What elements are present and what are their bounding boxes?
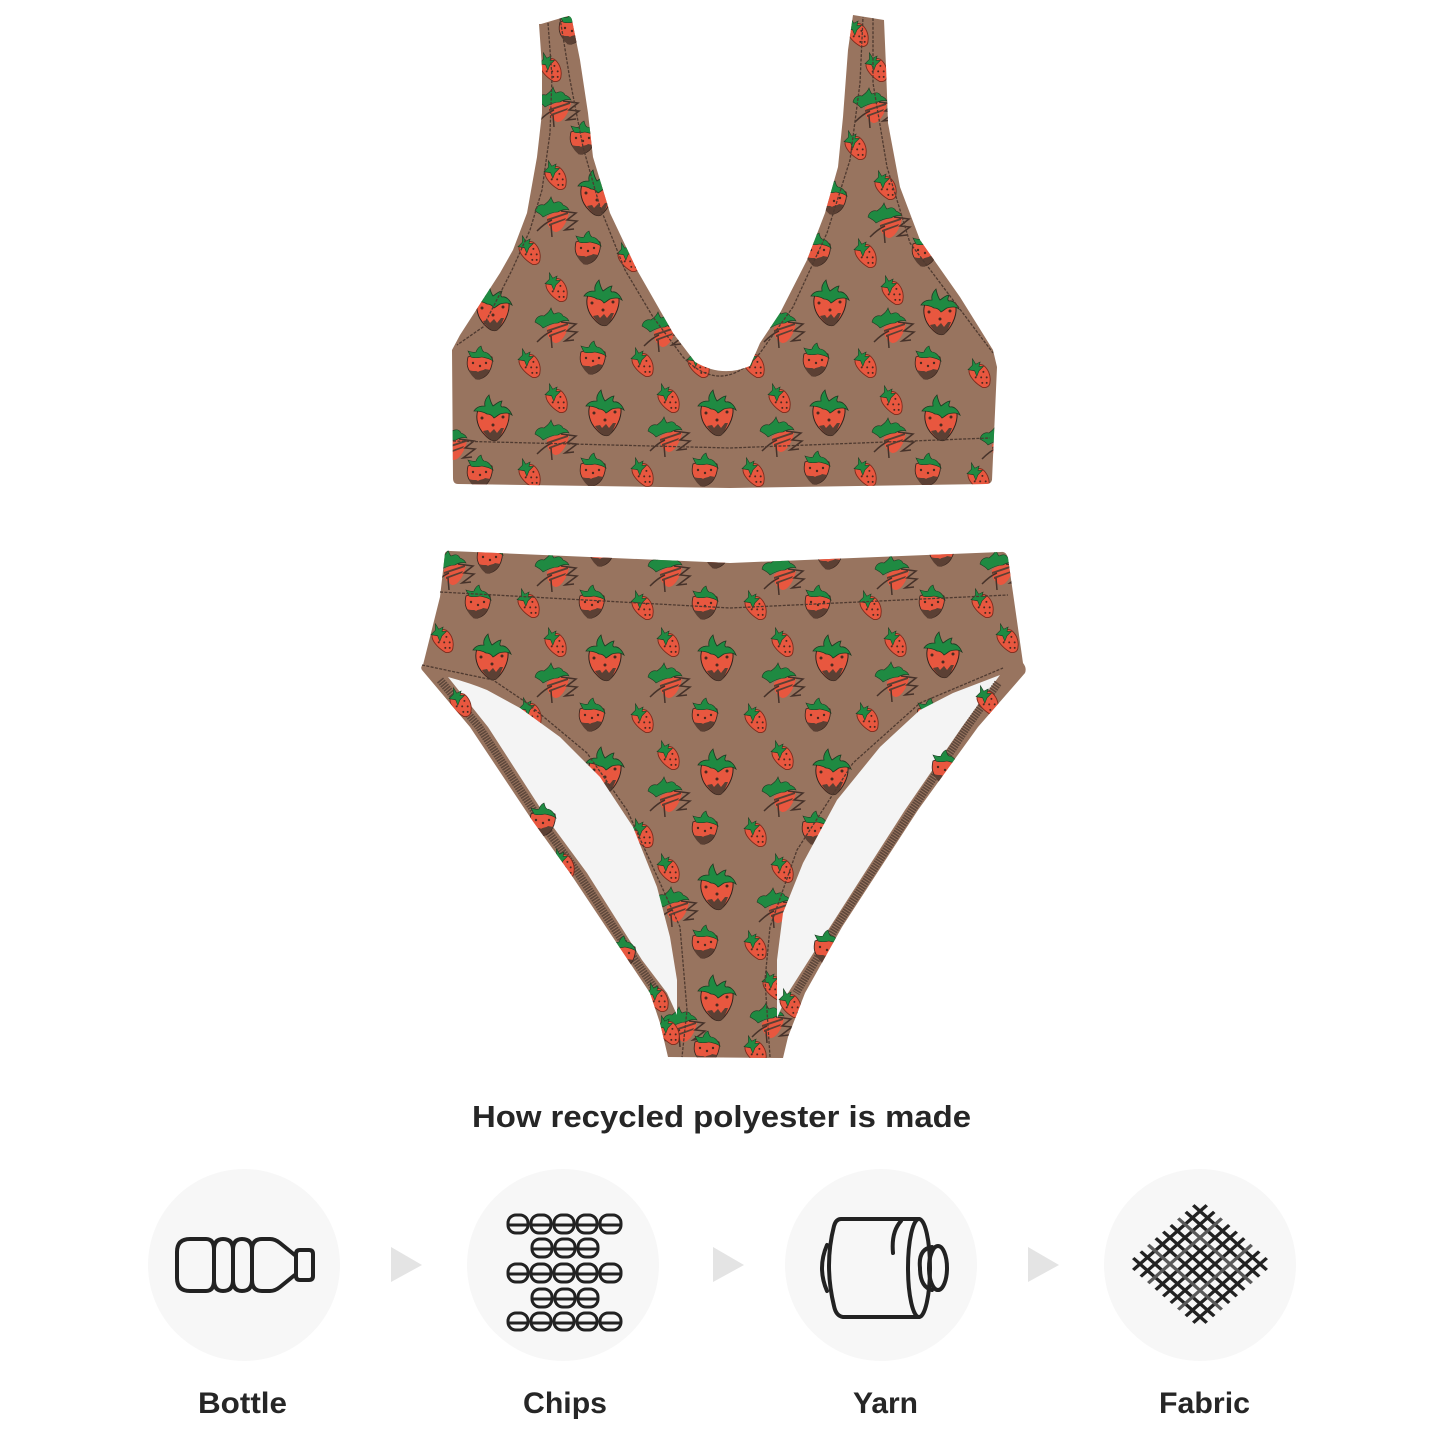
- circle: chips: [467, 1169, 659, 1361]
- inner lining: left: [448, 677, 677, 1015]
- icon: yarn: [822, 1219, 947, 1317]
- leg band ribbing: [440, 680, 998, 993]
- icon: chips: [508, 1215, 621, 1330]
- circle: bottle: [148, 1169, 340, 1361]
- step: bottle: [148, 1169, 340, 1420]
- stitching: bottom: [422, 592, 1008, 1057]
- label: bottle: Bottle: [198, 1387, 287, 1420]
- bikini bottom: [421, 533, 1026, 1065]
- circle: fabric: [1104, 1169, 1296, 1361]
- arrow 2: [713, 1247, 744, 1282]
- icon: bottle: [177, 1239, 313, 1291]
- strawberry pattern: top: [433, 11, 1022, 492]
- leg band berries: [449, 686, 998, 1045]
- strawberry pattern: bottom: [431, 533, 1022, 1065]
- label: fabric: Fabric: [1159, 1387, 1250, 1420]
- step: chips: [467, 1169, 659, 1420]
- inner lining: right: [777, 675, 1000, 1018]
- icon: fabric weave: [1126, 1199, 1274, 1329]
- step: fabric: [1104, 1169, 1296, 1420]
- stitching: top: [453, 17, 993, 448]
- bikini top: [433, 11, 1022, 492]
- arrow 3: [1028, 1247, 1059, 1282]
- fabric: top: [452, 15, 997, 488]
- fabric: bottom: [421, 551, 1026, 1058]
- circle: yarn: [785, 1169, 977, 1361]
- step: yarn: [785, 1169, 977, 1420]
- heading: How recycled polyester is made: [472, 1099, 971, 1134]
- label: yarn: Yarn: [853, 1387, 918, 1420]
- arrow 1: [391, 1247, 422, 1282]
- label: chips: Chips: [523, 1387, 607, 1420]
